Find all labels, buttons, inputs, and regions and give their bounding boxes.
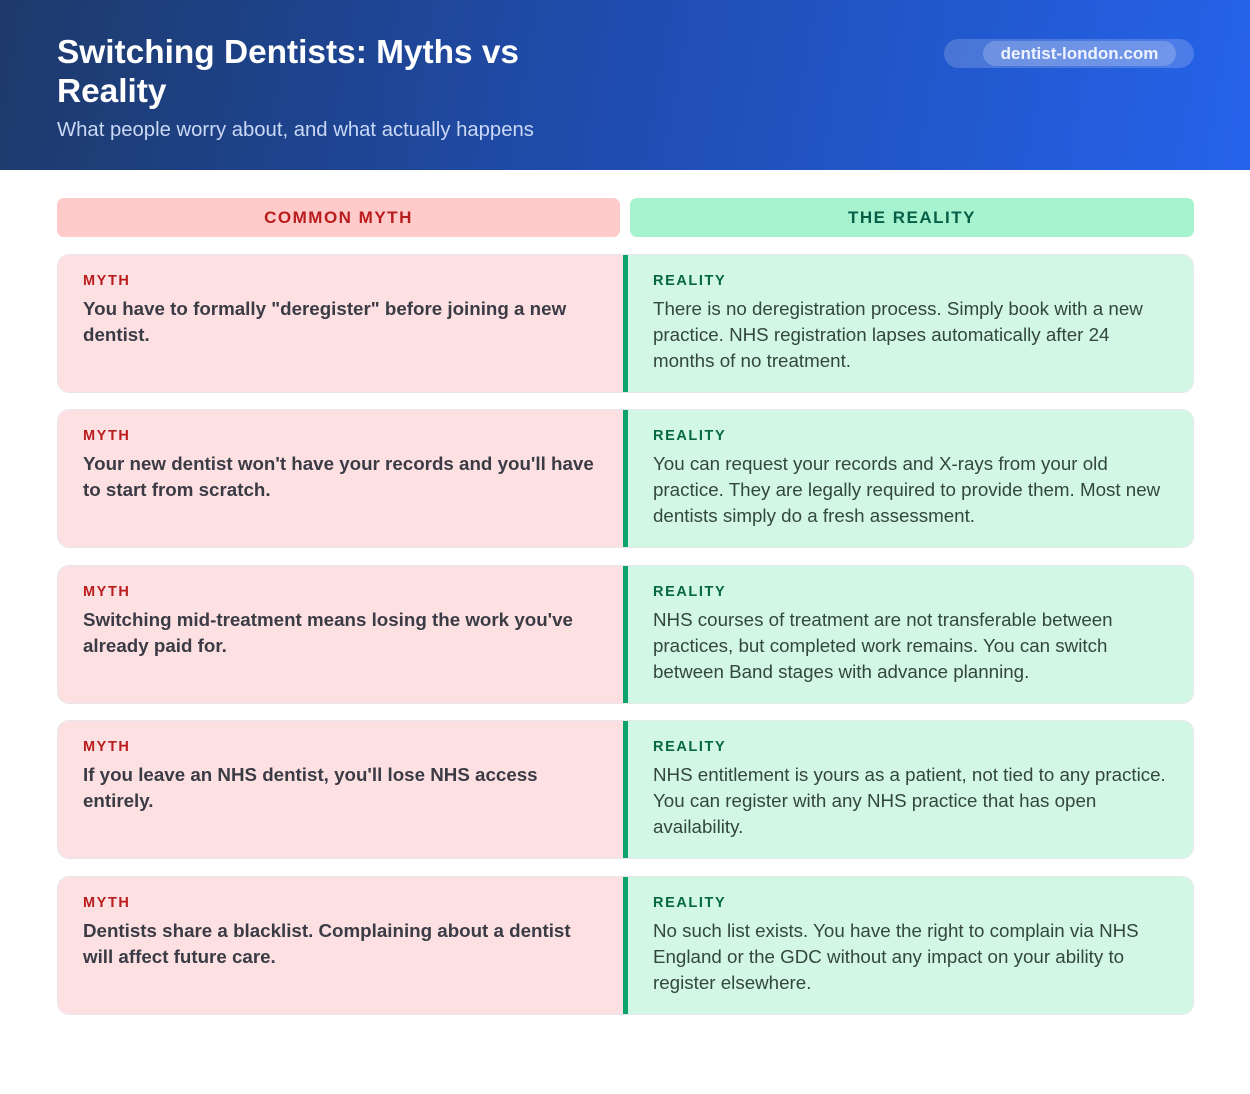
row 1 bbox=[57, 254, 1194, 393]
row 3: MYTH bbox=[83, 584, 130, 600]
row 1: You have to formally "deregister" before joining a new dentist. bbox=[83, 298, 566, 345]
row 2: MYTH bbox=[83, 428, 130, 444]
row 2: REALITY bbox=[653, 428, 726, 444]
column header: reality: THE REALITY bbox=[848, 208, 976, 227]
row 3: Switching mid-treatment means losing the work you've already paid for. bbox=[83, 609, 573, 656]
row 4: MYTH bbox=[83, 739, 130, 755]
row 5: MYTH bbox=[83, 895, 130, 911]
row 2: Your new dentist won't have your records and you'll have to start from scratch. bbox=[83, 453, 594, 500]
subtitle: What people worry about, and what actually happens bbox=[57, 119, 534, 141]
column header: myth: COMMON MYTH bbox=[264, 208, 413, 227]
column header: reality bbox=[630, 198, 1194, 237]
row 5: No such list exists. You have the right to complain via NHS England or the GDC without any impact on your ability to register elsewhere. bbox=[653, 920, 1139, 993]
row 3: REALITY bbox=[653, 584, 726, 600]
row 3: NHS courses of treatment are not transferable between practices, but completed work remains. You can switch between Band stages with advance planning. bbox=[653, 609, 1113, 682]
row 1: MYTH bbox=[83, 273, 130, 289]
row 5: REALITY bbox=[653, 895, 726, 911]
row 2 bbox=[57, 409, 1194, 548]
badge: website bbox=[944, 39, 1194, 68]
row 1: There is no deregistration process. Simply book with a new practice. NHS registration lapses automatically after 24 months of no treatment. bbox=[653, 298, 1143, 371]
title: Switching Dentists: Myths vs Reality bbox=[57, 34, 519, 110]
badge: website: dentist-london.com bbox=[1001, 44, 1158, 63]
column header: myth bbox=[57, 198, 620, 237]
row 1: REALITY bbox=[653, 273, 726, 289]
row 4 bbox=[57, 720, 1194, 859]
row 4: If you leave an NHS dentist, you'll lose NHS access entirely. bbox=[83, 764, 538, 811]
header banner bbox=[0, 0, 1250, 170]
row 4: REALITY bbox=[653, 739, 726, 755]
row 5: Dentists share a blacklist. Complaining about a dentist will affect future care. bbox=[83, 920, 571, 967]
row 2: You can request your records and X-rays from your old practice. They are legally required to provide them. Most new dentists simply do a fresh assessment. bbox=[653, 453, 1160, 526]
row 4: NHS entitlement is yours as a patient, not tied to any practice. You can register with any NHS practice that has open availability. bbox=[653, 764, 1166, 837]
row 5 bbox=[57, 876, 1194, 1015]
row 3 bbox=[57, 565, 1194, 704]
